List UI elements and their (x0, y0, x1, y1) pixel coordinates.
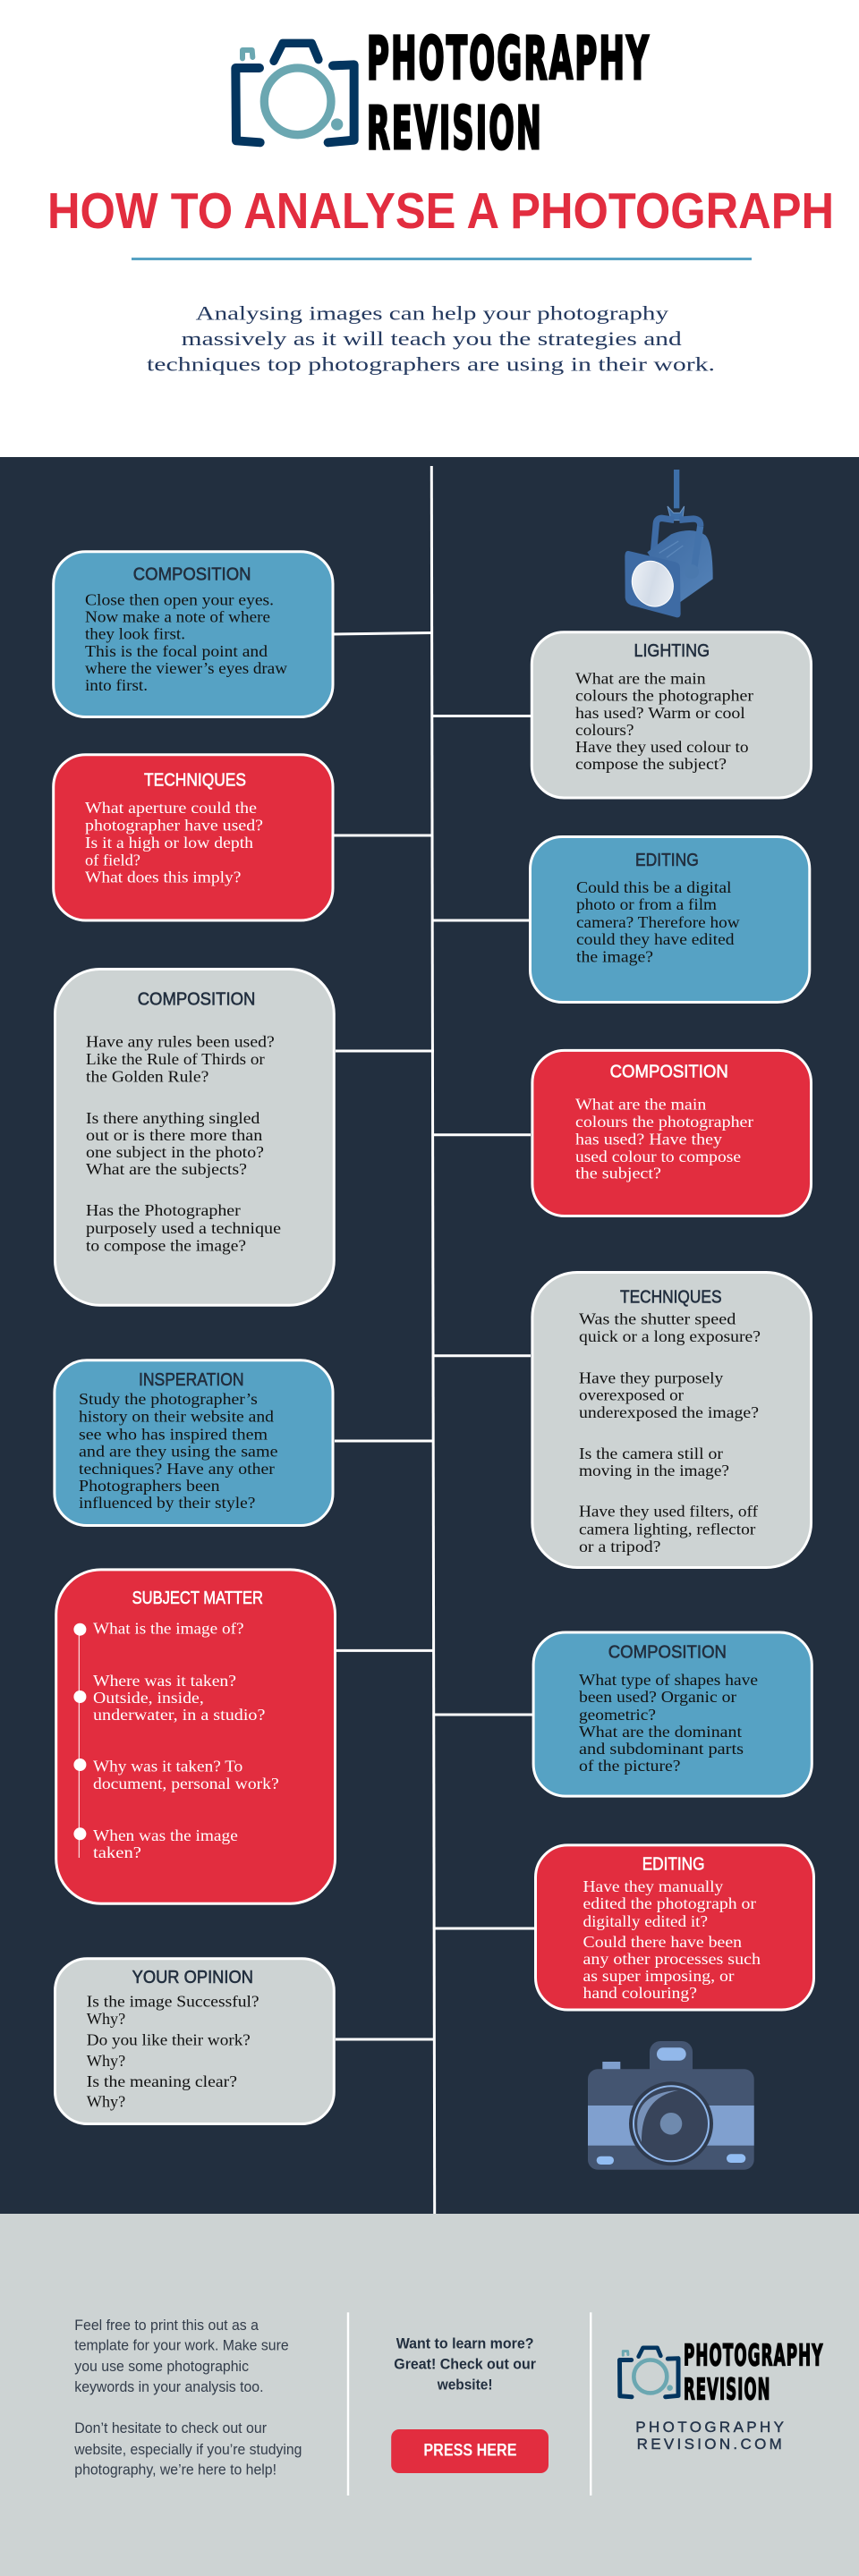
body text: What does this imply? (85, 868, 242, 886)
logo: header (235, 24, 651, 163)
body text: Was the shutter speed (579, 1309, 736, 1327)
footer text: print note: photography, we’re here to help! (74, 2462, 276, 2479)
footer wordmark line 2: REVISION (684, 2372, 771, 2406)
panel: composition (grey) (55, 970, 334, 1305)
panel: lighting (grey) (532, 632, 811, 798)
body text: underwater, in a studio? (93, 1706, 266, 1724)
body text: Study the photographer’s (79, 1390, 258, 1408)
footer website address (635, 2419, 784, 2453)
body text: edited the photograph or (583, 1894, 756, 1912)
body text: Why? (87, 2010, 125, 2028)
footer text: print note: Don’t hesitate to check out our (74, 2419, 267, 2436)
timeline spine (431, 466, 435, 2214)
body text: has used? Have they (575, 1131, 722, 1148)
logo wordmark line 2: REVISION (367, 94, 543, 163)
body text: Why was it taken? To (93, 1758, 243, 1775)
body text: the Golden Rule? (86, 1068, 209, 1086)
heading: LIGHTING (634, 640, 710, 661)
intro text: massively as it will teach you the strategies and (182, 327, 682, 350)
icon: stage spotlight (625, 470, 713, 617)
footer text: call to action: Great! Check out our (394, 2356, 536, 2373)
panel: techniques (red) (54, 755, 333, 920)
body text: This is the focal point and (85, 642, 268, 660)
intro text: Analysing images can help your photography (196, 301, 669, 324)
footer text: print note: template for your work. Make sure (74, 2337, 289, 2354)
body text: What is the image of? (93, 1620, 244, 1638)
heading: COMPOSITION (608, 1641, 727, 1662)
footer text: print note: you use some photographic (74, 2358, 249, 2375)
body text: as super imposing, or (583, 1967, 735, 1985)
body text: the image? (576, 947, 653, 965)
intro text: techniques top photographers are using in their work. (147, 352, 715, 375)
body text: they look first. (85, 625, 185, 643)
bullet timeline (73, 1623, 86, 1858)
heading: TECHNIQUES (144, 769, 246, 791)
body text: Outside, inside, (93, 1689, 204, 1707)
heading: EDITING (635, 850, 699, 870)
body text: Could this be a digital (576, 878, 732, 896)
logo wordmark line 1: PHOTOGRAPHY (367, 24, 651, 93)
body text (579, 1309, 761, 1555)
body text (79, 1390, 278, 1512)
body text: What are the main (575, 1096, 707, 1114)
panel: insperation (blue) (55, 1360, 333, 1526)
body text: techniques? Have any other (79, 1460, 275, 1478)
body text: Has the Photographer (86, 1201, 241, 1219)
footer website address: REVISION.COM (637, 2436, 782, 2453)
footer text: call to action: Want to learn more? (396, 2335, 533, 2352)
body text: into first. (85, 676, 148, 694)
dark background panel (0, 457, 859, 2214)
body text: Is there anything singled (86, 1109, 260, 1127)
body text: overexposed or (579, 1386, 684, 1404)
footer text: print note: website, especially if you’re studying (73, 2441, 302, 2458)
panel: footer (0, 2214, 859, 2576)
footer text: print note (73, 2317, 302, 2479)
heading: YOUR OPINION (132, 1967, 253, 1987)
button: press here: PRESS HERE (423, 2442, 517, 2461)
panel: subject matter (red) (56, 1570, 335, 1903)
body text: Have they manually (583, 1877, 724, 1895)
connector lines (334, 633, 534, 2039)
body text: could they have edited (576, 930, 735, 948)
body text: or a tripod? (579, 1538, 661, 1555)
footer divider right (590, 2312, 591, 2496)
body text: underexposed the image? (579, 1403, 759, 1421)
panel: your opinion (grey) (55, 1959, 334, 2123)
body text: Do you like their work? (87, 2030, 251, 2048)
body text: history on their website and (79, 1407, 274, 1425)
body text: digitally edited it? (583, 1912, 708, 1930)
body text: camera? Therefore how (576, 913, 740, 931)
body text: camera lighting, reflector (579, 1521, 756, 1538)
panel: composition (blue, lower) (533, 1632, 812, 1796)
body text: What are the main (575, 669, 706, 687)
body text: Is the image Successful? (87, 1993, 259, 2011)
button: press here (391, 2429, 549, 2473)
body text: Why? (87, 2093, 125, 2111)
body text: Like the Rule of Thirds or (86, 1050, 265, 1068)
body text: Why? (87, 2052, 125, 2070)
body text: colours? (575, 721, 634, 739)
heading: INSPERATION (139, 1369, 243, 1390)
body text: Have they used colour to (575, 738, 749, 756)
body text (579, 1671, 758, 1775)
body text: Close then open your eyes. (85, 590, 274, 608)
heading: COMPOSITION (610, 1062, 728, 1082)
body text: Now make a note of where (85, 608, 270, 626)
body text: been used? Organic or (579, 1688, 736, 1706)
body text: of the picture? (579, 1757, 681, 1775)
body text: Have they purposely (579, 1368, 724, 1386)
body text: Have any rules been used? (86, 1033, 275, 1051)
body text: purposely used a technique (86, 1219, 281, 1237)
body text: quick or a long exposure? (579, 1327, 761, 1345)
body text: any other processes such (583, 1950, 761, 1968)
body text (86, 1033, 281, 1254)
heading: SUBJECT MATTER (132, 1588, 263, 1608)
body text (87, 1993, 259, 2111)
icon: footer logo camera (619, 2348, 678, 2397)
body text: to compose the image? (86, 1236, 246, 1254)
body text: Is it a high or low depth (85, 834, 253, 852)
icon: logo camera (235, 43, 354, 142)
body text: compose the subject? (575, 755, 727, 773)
body text (85, 799, 263, 886)
body text (575, 669, 753, 773)
body text: the subject? (575, 1165, 661, 1182)
body text: What type of shapes have (579, 1671, 758, 1689)
body text: photo or from a film (576, 895, 717, 913)
body text: photographer have used? (85, 816, 263, 834)
body text: Is the camera still or (579, 1445, 723, 1462)
body text: hand colouring? (583, 1984, 697, 2002)
title divider (132, 258, 752, 260)
body text: geometric? (579, 1706, 656, 1724)
body text (93, 1620, 279, 1861)
footer text: print note: keywords in your analysis too. (74, 2378, 263, 2395)
body text: Photographers been (79, 1477, 220, 1495)
footer text: print note: Feel free to print this out as a (74, 2317, 259, 2334)
panel: composition (red) (532, 1050, 811, 1216)
panel: editing (red) (535, 1845, 814, 2010)
body text: Could there have been (583, 1933, 742, 1951)
heading: COMPOSITION (133, 564, 251, 585)
body text: one subject in the photo? (86, 1143, 264, 1161)
body text: used colour to compose (575, 1148, 741, 1165)
body text: What are the dominant (579, 1723, 742, 1741)
body text: taken? (93, 1843, 141, 1861)
panel: composition (blue) (54, 552, 333, 717)
body text: influenced by their style? (79, 1494, 256, 1512)
body text: Where was it taken? (93, 1672, 236, 1690)
body text (576, 878, 740, 965)
intro text (147, 301, 715, 375)
body text: Have they used filters, off (579, 1503, 758, 1521)
body text (583, 1877, 761, 2002)
body text: out or is there more than (86, 1126, 263, 1144)
body text (575, 1096, 753, 1182)
heading: COMPOSITION (138, 988, 255, 1009)
body text: see who has inspired them (79, 1426, 268, 1444)
body text (85, 590, 287, 694)
logo: footer (619, 2337, 823, 2406)
body text: What aperture could the (85, 799, 257, 817)
heading: EDITING (642, 1853, 705, 1874)
body text: colours the photographer (575, 687, 753, 705)
body text: colours the photographer (575, 1113, 753, 1131)
body text: moving in the image? (579, 1462, 729, 1479)
body text: When was the image (93, 1826, 238, 1844)
body text: Is the meaning clear? (87, 2072, 237, 2090)
body text: where the viewer’s eyes draw (85, 659, 287, 677)
panel: techniques (grey) (532, 1272, 811, 1567)
panel: editing (blue) (530, 837, 810, 1002)
footer divider left (347, 2312, 349, 2496)
icon: camera illustration (588, 2041, 754, 2170)
footer website address: PHOTOGRAPHY (635, 2419, 784, 2436)
footer text: call to action: website! (437, 2377, 492, 2394)
body text: What are the subjects? (86, 1160, 247, 1178)
heading: TECHNIQUES (620, 1286, 721, 1307)
body text: has used? Warm or cool (575, 704, 745, 722)
body text: and subdominant parts (579, 1740, 744, 1758)
body text: and are they using the same (79, 1443, 278, 1461)
footer text: call to action (394, 2335, 536, 2394)
body text: of field? (85, 851, 140, 869)
body text: document, personal work? (93, 1775, 279, 1792)
